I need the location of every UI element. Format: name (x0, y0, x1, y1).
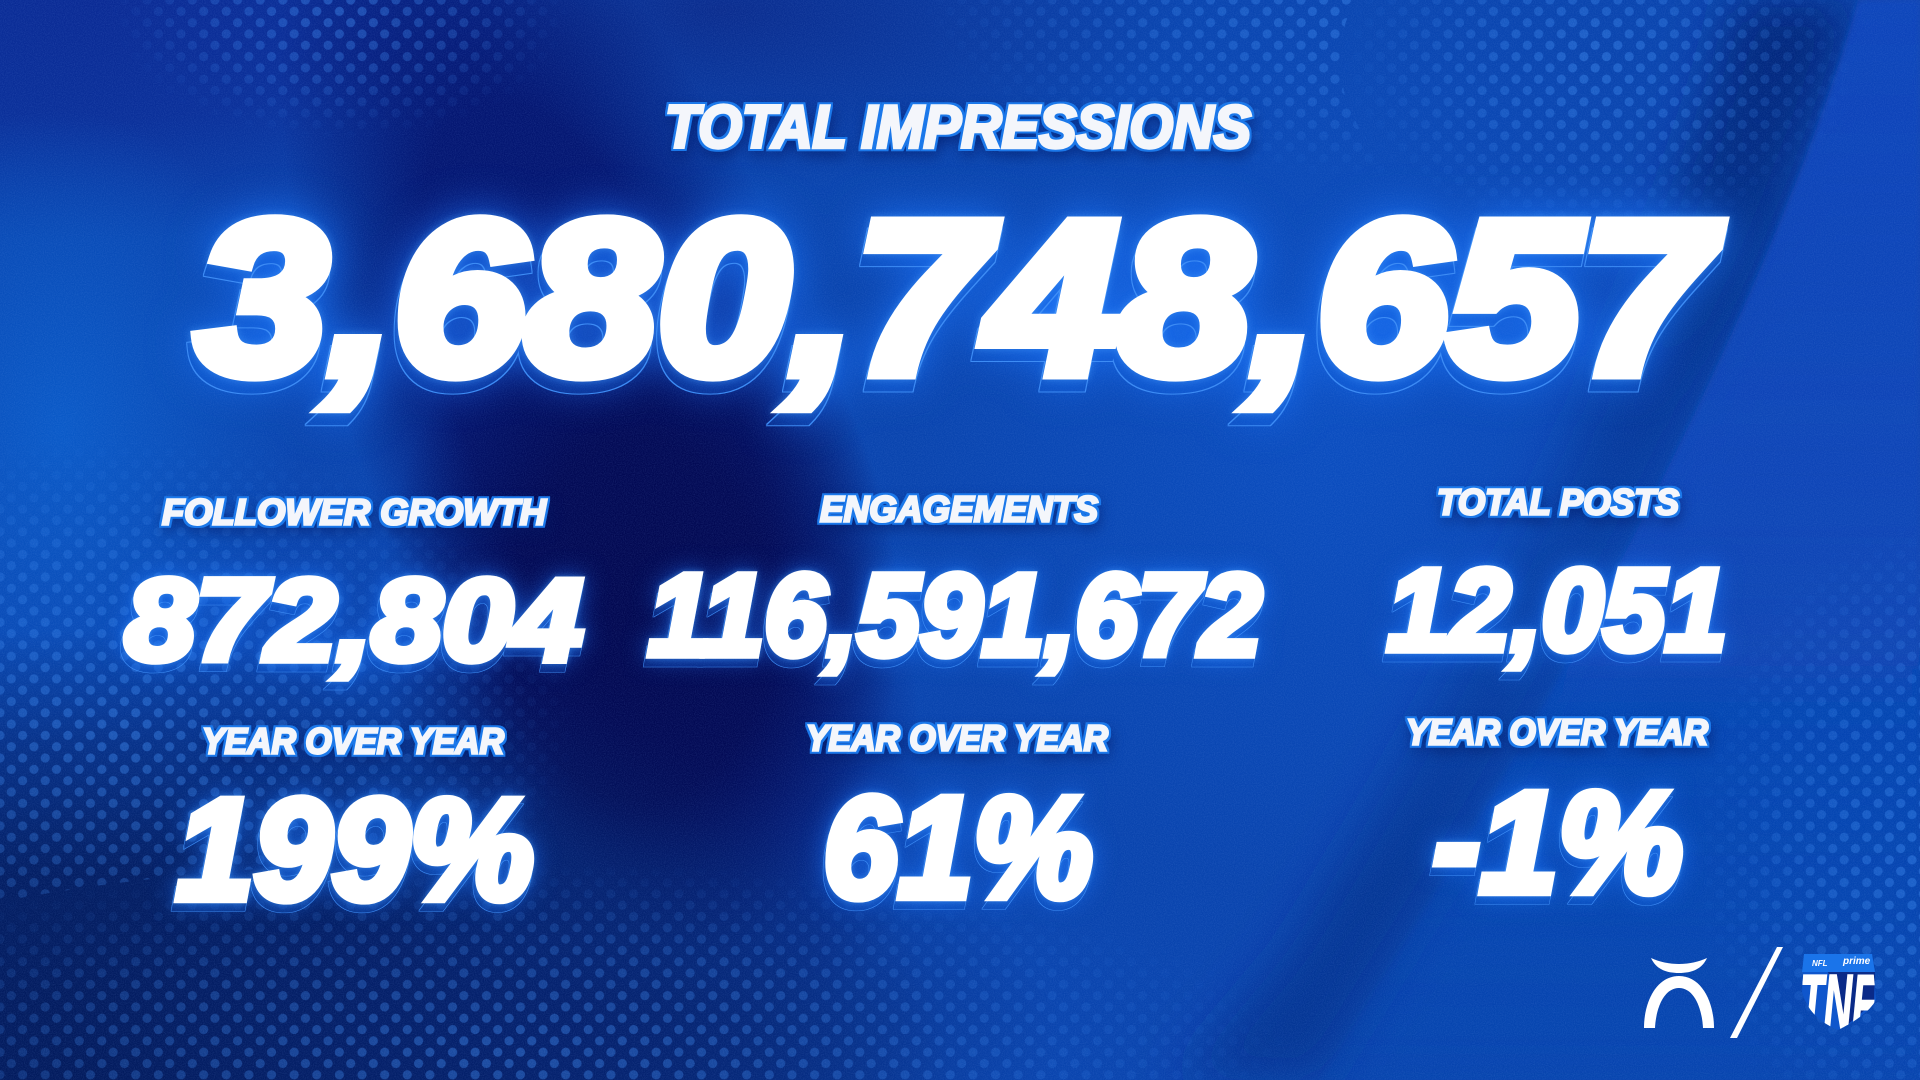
label: total posts: TOTAL POSTS (1437, 482, 1679, 522)
label: year over year: YEAR OVER YEAR (1406, 712, 1708, 752)
big number: total impressions: 3,680,748,657 (196, 177, 1722, 420)
shield text: prime: prime (1842, 956, 1871, 967)
value: 61 percent: 61% (823, 767, 1093, 928)
label: year over year: YEAR OVER YEAR (806, 718, 1108, 758)
divider slash (1730, 947, 1783, 1038)
value: engagements: 116,591,672 (648, 550, 1262, 680)
heading: total impressions: TOTAL IMPRESSIONS (665, 94, 1251, 160)
value: follower growth: 872,804 (125, 555, 583, 685)
stat column: follower growth (125, 492, 583, 930)
value: total posts: 12,051 (1387, 545, 1727, 675)
value: 199 percent: 199% (176, 769, 534, 930)
icon: brand logo (1644, 958, 1714, 1028)
shield text: NFL: NFL (1812, 959, 1828, 968)
stat column: total posts (1387, 482, 1727, 923)
label: year over year: YEAR OVER YEAR (202, 720, 504, 762)
icon: TNF shield (1802, 954, 1876, 1030)
label: engagements: ENGAGEMENTS (820, 488, 1098, 530)
value: minus 1 percent: -1% (1433, 762, 1683, 923)
label: follower growth: FOLLOWER GROWTH (162, 492, 547, 532)
stat column: engagements (648, 488, 1262, 928)
